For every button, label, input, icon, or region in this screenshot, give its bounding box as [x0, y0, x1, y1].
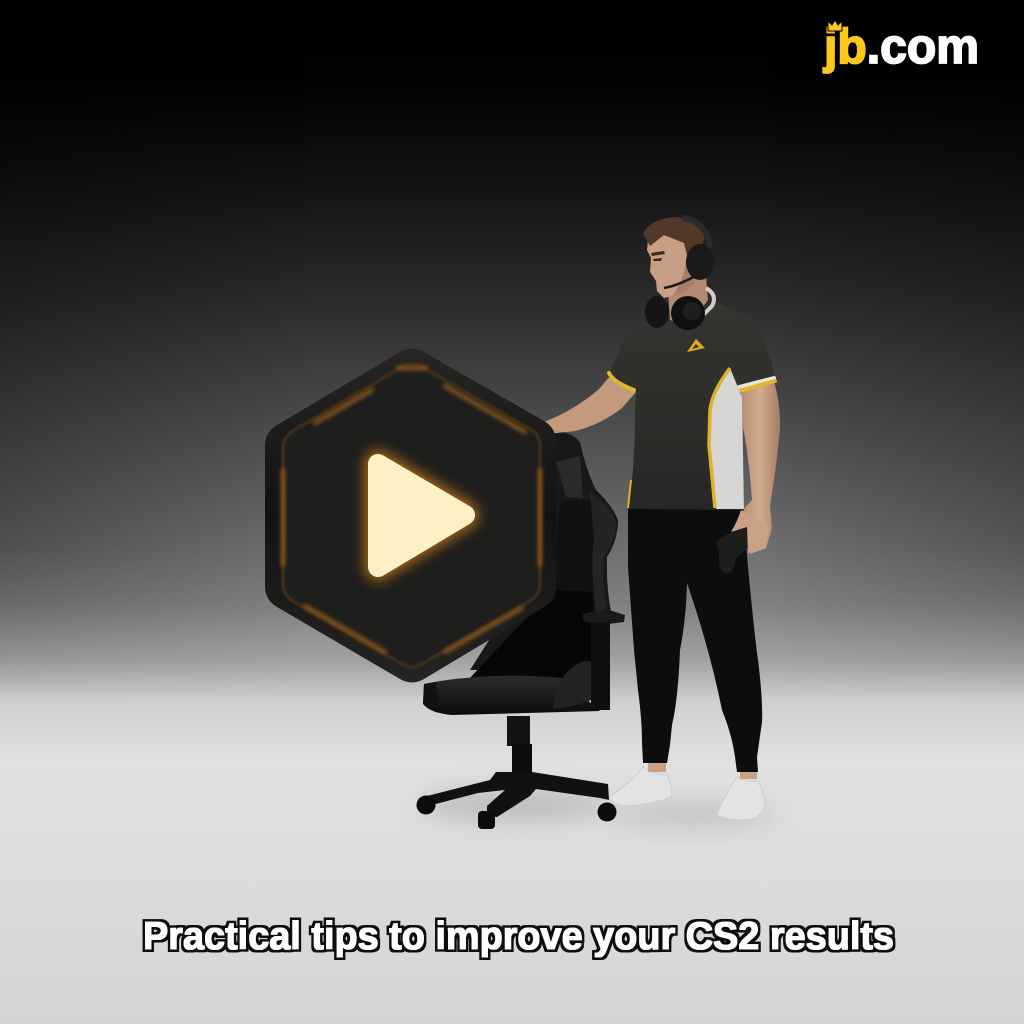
chair armrest	[583, 609, 625, 625]
jersey sleeve trims	[609, 373, 775, 391]
logo text: jb.com	[823, 20, 979, 74]
eye and brow	[651, 251, 665, 261]
play icon	[378, 464, 465, 567]
caption: Practical tips to improve your CS2 results	[143, 915, 894, 958]
chair lower back	[468, 590, 598, 680]
neck	[668, 275, 708, 325]
person	[540, 217, 780, 820]
jersey lower-left yellow piping	[628, 480, 631, 508]
chair base	[423, 772, 609, 817]
jersey white side panel	[710, 368, 744, 509]
jersey	[608, 302, 775, 510]
face	[647, 226, 702, 298]
logo crown	[828, 20, 842, 31]
shoes	[610, 767, 765, 820]
chair side bolster	[553, 661, 599, 709]
chair gas cylinder	[507, 716, 532, 780]
logo: jb.com	[823, 20, 979, 74]
hexagon inner recess	[283, 364, 540, 667]
neck headphones	[645, 288, 714, 330]
jersey yellow stripe	[709, 368, 730, 508]
floor shadows	[420, 791, 775, 825]
hexagon amber glow segments	[283, 368, 540, 652]
headset band	[682, 218, 710, 248]
jersey logo	[687, 339, 705, 352]
fingers over controller	[731, 510, 770, 553]
game controller	[716, 526, 750, 574]
skin at ankles	[648, 760, 757, 779]
headset microphone	[664, 275, 697, 288]
gaming chair	[416, 432, 625, 829]
left arm resting on hexagon	[540, 376, 636, 434]
hexagon play badge	[265, 348, 556, 682]
chair casters	[416, 796, 616, 829]
right arm	[741, 381, 780, 554]
headset ear cup	[686, 244, 714, 280]
black jogger pants	[628, 508, 762, 772]
hair	[643, 217, 705, 264]
chair backrest	[470, 432, 618, 670]
hexagon outer frame	[265, 348, 556, 682]
play icon glow	[378, 464, 465, 567]
jaw shading	[672, 250, 702, 297]
chair seat	[423, 676, 600, 715]
